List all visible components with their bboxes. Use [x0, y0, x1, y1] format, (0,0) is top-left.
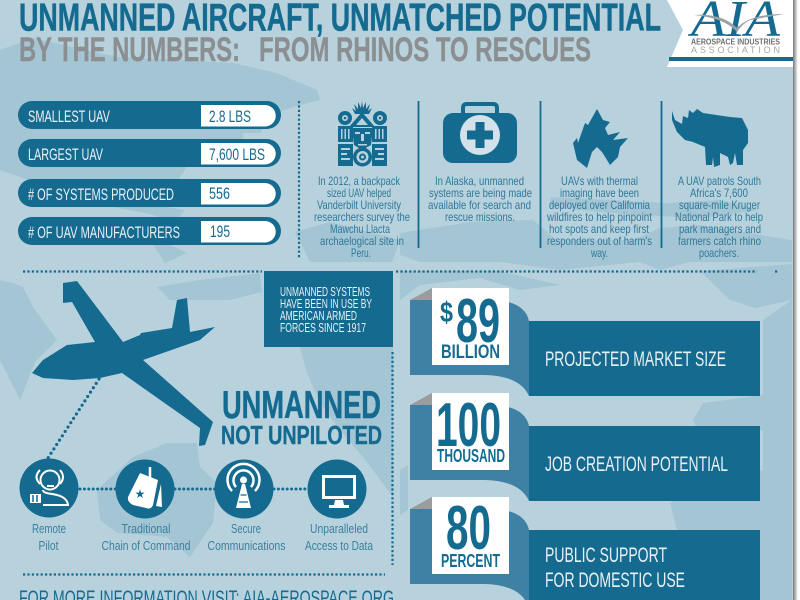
icon: chain of command dog tags: ★	[135, 487, 145, 501]
text: California wildfires: UAVs with thermal	[561, 174, 638, 188]
text: California wildfires: deployed over California	[549, 198, 650, 212]
icon: secure communications tower	[214, 460, 274, 518]
capability labels: Remote	[32, 521, 66, 536]
text: Peru archaeological site: sized UAV helped	[327, 186, 391, 200]
capability labels: Access to Data	[305, 538, 374, 553]
text: Peru archaeological site: archaelogical site in	[320, 234, 404, 248]
text: Peru archaeological site: Peru.	[351, 246, 371, 260]
ribbon: public support	[410, 494, 760, 600]
icon: Mayan mask	[338, 101, 387, 166]
pill: smallest UAV	[18, 101, 281, 129]
title: BY THE NUMBERS:	[19, 31, 240, 69]
capability labels	[32, 521, 374, 553]
pill: largest UAV	[18, 139, 281, 167]
pill: UAV manufacturers: 195	[210, 222, 230, 241]
logo: Aerospace Industries Association	[667, 0, 793, 67]
pill: largest UAV: LARGEST UAV	[28, 145, 103, 164]
ribbon: public support: PERCENT	[441, 551, 500, 571]
text: California wildfires: wildfires to help pinpoint	[546, 210, 653, 224]
pill: largest UAV: 7,600 LBS	[209, 145, 265, 164]
text: Kruger rhino patrol: A UAV patrols South	[678, 174, 761, 188]
icon: remote pilot	[20, 458, 78, 518]
ribbon: public support: PUBLIC SUPPORT	[545, 544, 667, 567]
text: California wildfires: hot spots and keep first	[549, 222, 650, 236]
callout: in use since 1917: FORCES SINCE 1917	[280, 321, 366, 335]
text: Peru archaeological site: researchers survey the	[314, 210, 410, 224]
ribbon: job creation potential	[410, 391, 760, 501]
ribbon: job creation potential: 100	[436, 391, 501, 460]
icon: fire	[573, 109, 628, 168]
ribbon: projected market size: 89	[456, 287, 500, 356]
ribbon: public support: FOR DOMESTIC USE	[545, 569, 685, 592]
heading: unmanned not unpiloted: NOT UNPILOTED	[221, 420, 382, 450]
text: Kruger rhino patrol: National Park to help	[675, 210, 763, 224]
capability labels: Pilot	[38, 538, 59, 553]
text: Alaska search and rescue: systems are being made	[429, 186, 532, 200]
ribbon: job creation potential: THOUSAND	[437, 446, 505, 466]
capability labels: Traditional	[122, 521, 171, 536]
text: California wildfires	[546, 174, 653, 260]
pill: systems produced: # OF SYSTEMS PRODUCED	[28, 185, 174, 204]
text: Kruger rhino patrol: farmers catch rhino	[678, 234, 761, 248]
text: Peru archaeological site: Mawchu Llacta	[330, 222, 390, 236]
icon: chain of command dog tags	[116, 460, 174, 518]
pill: UAV manufacturers	[18, 217, 281, 245]
ribbon: projected market size: $	[440, 297, 453, 329]
text: Alaska search and rescue: available for search and	[428, 198, 531, 212]
capability labels: Chain of Command	[102, 538, 190, 553]
pill: smallest UAV: 2.8 LBS	[209, 107, 251, 126]
icon: rhino	[672, 109, 748, 167]
capability labels: Unparalleled	[310, 521, 368, 536]
text: Alaska search and rescue: rescue missions.	[445, 210, 515, 224]
text: Peru archaeological site: Vanderbilt University	[317, 198, 401, 212]
text: Kruger rhino patrol	[675, 174, 763, 260]
text: Kruger rhino patrol: poachers.	[699, 246, 739, 260]
capability labels: Communications	[208, 538, 286, 553]
capability labels: Secure	[231, 521, 261, 536]
text: Kruger rhino patrol: park managers and	[679, 222, 761, 236]
icon: medical kit	[443, 104, 517, 163]
text: California wildfires: responders out of harm's	[547, 234, 652, 248]
text: Peru archaeological site	[314, 174, 410, 260]
ribbon: projected market size: BILLION	[441, 342, 500, 363]
pill: UAV manufacturers: # OF UAV MANUFACTURERS	[28, 223, 180, 242]
stat pills	[18, 101, 281, 245]
callout: in use since 1917	[264, 271, 393, 347]
icon: drone silhouette	[32, 281, 215, 446]
logo: Aerospace Industries Association: ASSOCIATION	[691, 45, 780, 55]
heading: unmanned not unpiloted: UNMANNED	[222, 384, 381, 427]
callout: in use since 1917: UNMANNED SYSTEMS	[280, 285, 370, 299]
text: Alaska search and rescue: In Alaska, unmanned	[435, 174, 524, 188]
logo: Aerospace Industries Association: AEROSPACE INDUSTRIES	[691, 36, 780, 46]
pill: smallest UAV: SMALLEST UAV	[28, 107, 110, 126]
pill: systems produced: 556	[209, 184, 230, 203]
text: California wildfires: imaging have been	[560, 186, 639, 200]
title	[19, 0, 661, 69]
callout: in use since 1917: HAVE BEEN IN USE BY	[280, 297, 372, 311]
heading: unmanned not unpiloted	[221, 384, 382, 450]
text: Kruger rhino patrol: square-mile Kruger	[679, 198, 760, 212]
ribbon: projected market size	[410, 287, 760, 396]
title: FROM RHINOS TO RESCUES	[259, 31, 591, 69]
text: Kruger rhino patrol: Africa's 7,600	[690, 186, 748, 200]
callout: in use since 1917: AMERICAN ARMED	[280, 309, 357, 323]
icon: data monitor	[308, 460, 366, 518]
text: Peru archaeological site: In 2012, a backpack	[318, 174, 401, 188]
text: Alaska search and rescue	[428, 174, 532, 224]
pill: systems produced	[18, 179, 281, 207]
ribbon: public support: 80	[446, 494, 491, 563]
text: California wildfires: way.	[590, 246, 608, 260]
